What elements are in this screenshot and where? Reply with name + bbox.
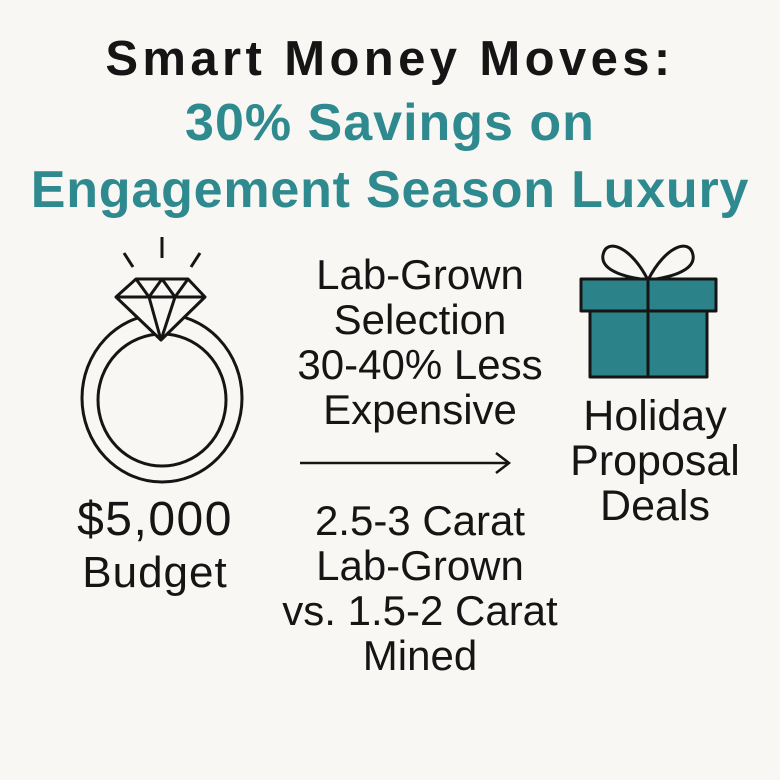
middle text: lab-grown: Selection (334, 296, 506, 343)
holiday text: Proposal (570, 437, 740, 485)
holiday text: Deals (600, 482, 710, 530)
comparison text: vs. 1.5-2 Carat (282, 587, 558, 634)
icon: ring (80, 237, 244, 484)
holiday text: Holiday (583, 392, 727, 440)
subtitle line 2: Engagement Season Luxury (31, 161, 749, 219)
comparison text (282, 497, 558, 679)
icon: gift (580, 244, 718, 378)
arrow (300, 452, 511, 474)
subtitle line 1: 30% Savings on (185, 94, 595, 152)
budget text: Budget (82, 548, 228, 597)
budget text: $5,000 (77, 493, 233, 546)
budget text (77, 493, 233, 597)
comparison text: 2.5-3 Carat (315, 497, 525, 544)
middle text: lab-grown (297, 251, 543, 433)
middle text: lab-grown: Expensive (323, 386, 517, 433)
comparison text: Mined (363, 632, 477, 679)
middle text: lab-grown: 30-40% Less (297, 341, 543, 388)
holiday text (570, 392, 740, 530)
title: Smart Money Moves: (105, 32, 675, 86)
comparison text: Lab-Grown (316, 542, 524, 589)
middle text: lab-grown: Lab-Grown (316, 251, 524, 298)
